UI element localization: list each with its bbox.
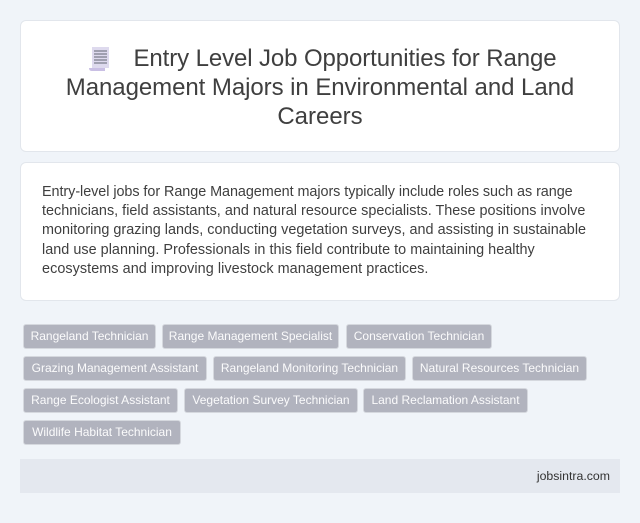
icon: document scroll [89,47,109,71]
tag: Grazing Management Assistant [23,356,207,381]
tag: Conservation Technician: Conservation Technician [354,329,484,343]
description line 1: Entry-level jobs for Range Management majors typically include roles such as range [42,184,573,200]
tag: Wildlife Habitat Technician [23,420,181,445]
tag: Vegetation Survey Technician: Vegetation Survey Technician [192,393,350,407]
tag: Rangeland Monitoring Technician [213,356,406,381]
tag: Conservation Technician [346,324,492,349]
description line 2: technicians, field assistants, and natural resource specialists. These positions involve [42,203,585,219]
tag: Range Ecologist Assistant: Range Ecologist Assistant [31,393,170,407]
tag: Range Management Specialist: Range Management Specialist [169,329,332,343]
description line 4: land use planning. Professionals in this field contribute to maintaining healthy [42,242,535,258]
tag: Range Ecologist Assistant [23,388,178,413]
tag: Wildlife Habitat Technician: Wildlife Habitat Technician [32,425,172,439]
tag: Rangeland Monitoring Technician: Rangeland Monitoring Technician [221,361,398,375]
footer text: jobsintra.com [537,469,610,483]
tag: Land Reclamation Assistant [363,388,528,413]
tag list [23,324,587,445]
panel: description card [20,162,620,301]
footer bar [20,459,620,493]
tag: Land Reclamation Assistant: Land Reclamation Assistant [371,393,520,407]
tag: Rangeland Technician [23,324,156,349]
tag: Rangeland Technician: Rangeland Technician [31,329,148,343]
description line 5: ecosystems and improving livestock management practices. [42,261,428,277]
description line 3: monitoring grazing lands, conducting vegetation surveys, and assisting in sustainable [42,222,586,238]
tag: Grazing Management Assistant: Grazing Management Assistant [32,361,198,375]
tag: Range Management Specialist [162,324,339,349]
tag: Natural Resources Technician [412,356,587,381]
panel: title card [20,20,620,152]
tag: Vegetation Survey Technician [184,388,358,413]
title line 1: Entry Level Job Opportunities for Range [133,45,556,72]
title line 3: Careers [277,103,363,130]
title line 2: Management Majors in Environmental and Land [66,74,574,101]
tag: Natural Resources Technician: Natural Resources Technician [420,361,579,375]
